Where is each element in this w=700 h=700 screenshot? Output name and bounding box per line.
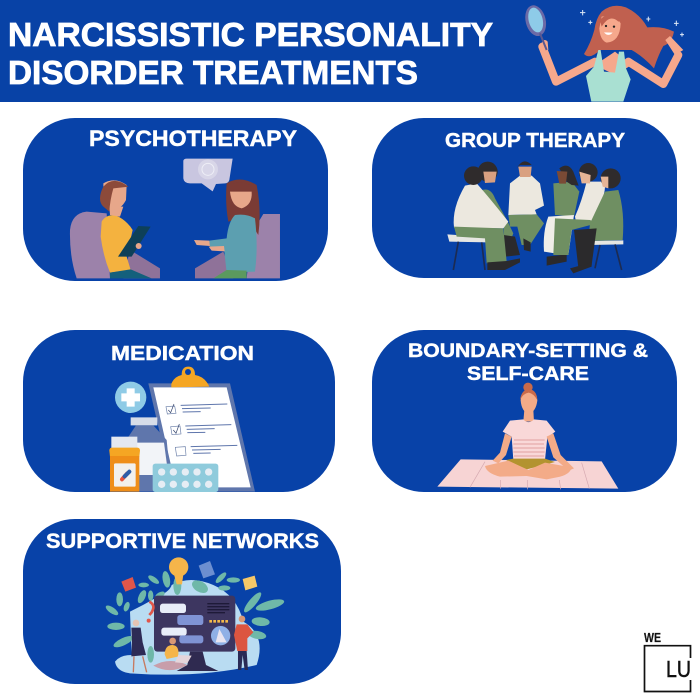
heading: psychotherapy: PSYCHOTHERAPY [89, 126, 297, 151]
illustration: clipboard and pills [109, 367, 255, 492]
panel: supportive networks [23, 519, 341, 684]
icon: woman with mirror [522, 3, 684, 102]
heading: boundary-setting and self-care [408, 341, 648, 385]
illustration: online community monitor [104, 557, 285, 675]
panel: boundary-setting and self-care [372, 330, 677, 492]
title: NARCISSISTIC PERSONALITY [8, 16, 493, 53]
title [8, 16, 493, 91]
panel: group therapy [372, 118, 677, 278]
heading: medication: MEDICATION [111, 343, 254, 365]
heading: boundary-setting and self-care: BOUNDARY-SETTING & [408, 341, 648, 362]
illustration: therapist and patient [70, 159, 280, 278]
logo: We Lu [644, 631, 691, 692]
logo: We Lu: LU [666, 656, 691, 682]
heading: supportive networks: SUPPORTIVE NETWORKS [46, 530, 319, 553]
title: DISORDER TREATMENTS [8, 54, 418, 91]
illustration: woman meditating on mat [437, 383, 618, 489]
header banner [0, 0, 700, 102]
panel: psychotherapy [23, 118, 328, 281]
heading: group therapy: GROUP THERAPY [445, 130, 626, 152]
panel: medication [23, 330, 335, 492]
logo: We Lu: WE [644, 631, 661, 645]
illustration: seated group [447, 161, 623, 273]
heading: boundary-setting and self-care: SELF-CARE [467, 364, 589, 385]
